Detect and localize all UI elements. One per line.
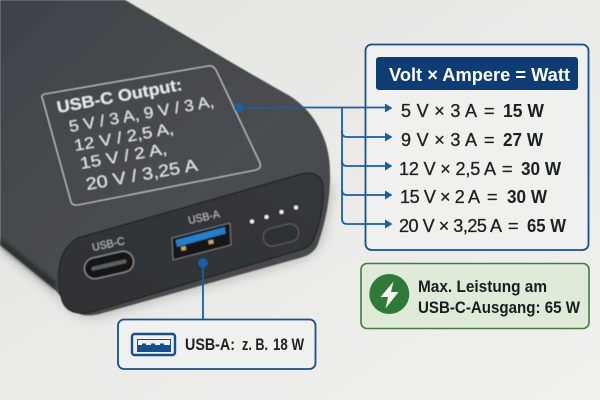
row 12V: 30 W <box>521 159 561 179</box>
callout text <box>418 277 581 317</box>
row 5V: 15 W <box>503 101 544 121</box>
callout: USB-A <box>118 320 316 369</box>
printed label: 20 V / 3,25 A <box>84 155 200 194</box>
row 15V: 30 W <box>507 187 547 207</box>
row 20V: = <box>508 216 519 236</box>
row 15V <box>400 187 547 207</box>
port face <box>59 173 323 313</box>
connector arrows <box>234 103 392 228</box>
row 9V: 27 W <box>503 130 543 150</box>
row 20V: 65 W <box>527 216 566 236</box>
row 20V <box>399 216 566 236</box>
callout text: USB-C-Ausgang: 65 W <box>418 298 581 317</box>
callout: max power <box>361 264 589 328</box>
LED indicators <box>250 206 298 224</box>
USB-A text: 18 W <box>273 336 304 354</box>
row 9V <box>401 130 543 150</box>
table heading: Volt × Ampere = Watt <box>389 64 570 85</box>
USB-A label on face: USB-A <box>187 208 222 227</box>
USB-C port <box>82 249 136 281</box>
panel: volt ampere watt table <box>366 44 588 250</box>
power bank <box>0 0 334 319</box>
row 5V: = <box>484 101 495 121</box>
callout text: Max. Leistung am <box>418 277 547 296</box>
row 20V: 20 V × 3,25 A <box>399 216 502 236</box>
USB-A port <box>172 223 231 260</box>
row 12V: 12 V × 2,5 A <box>399 159 496 179</box>
USB-A text: z. B. <box>242 336 268 354</box>
icon: lightning bolt <box>369 274 409 314</box>
row 12V: = <box>502 159 513 179</box>
USB-A text <box>185 336 304 354</box>
printed label <box>42 66 260 205</box>
row 15V: 15 V × 2 A <box>400 187 480 207</box>
printed label: 12 V / 2,5 A, <box>73 121 175 155</box>
row 9V: 9 V × 3 A <box>401 130 477 150</box>
icon: USB-A plug <box>132 334 175 355</box>
row 9V: = <box>484 130 495 150</box>
table heading <box>376 57 578 90</box>
connector: USB-A <box>198 258 208 319</box>
printed label: USB-C Output: <box>55 76 184 117</box>
row 5V <box>401 101 544 121</box>
row 15V: = <box>487 187 498 207</box>
USB-C label on face: USB-C <box>91 235 126 254</box>
printed label: 15 V / 2 A, <box>79 141 168 173</box>
USB-A text: USB-A: <box>185 336 235 354</box>
power button <box>261 222 301 248</box>
row 5V: 5 V × 3 A <box>401 101 477 121</box>
row 12V <box>399 159 561 179</box>
printed label: 5 V / 3 A, 9 V / 3 A, <box>68 94 215 136</box>
